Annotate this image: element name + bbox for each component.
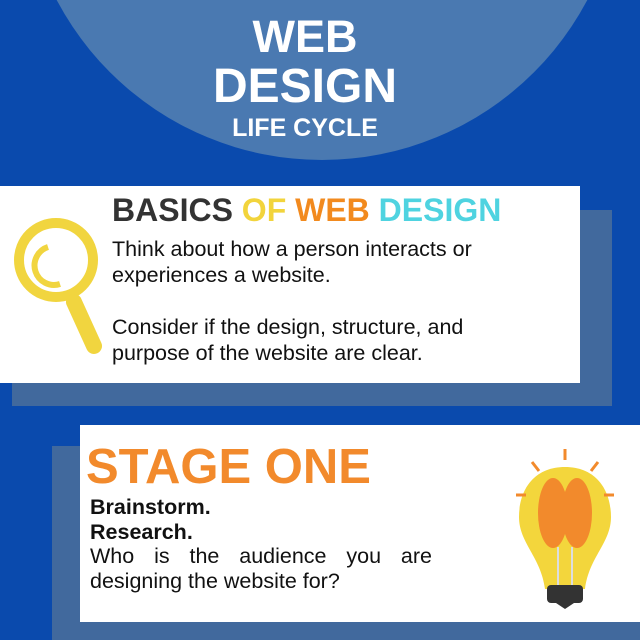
title: DESIGN xyxy=(213,60,397,113)
shadow panel 1 xyxy=(12,210,612,406)
text: stage one body: Who is the audience you are designing the website for? xyxy=(90,544,432,592)
title: LIFE CYCLE xyxy=(232,114,378,142)
header circle xyxy=(22,0,622,160)
title xyxy=(213,11,397,142)
title: WEB xyxy=(252,11,358,62)
icon: lightbulb brain xyxy=(516,449,614,609)
text: stage one body: Brainstorm. xyxy=(90,495,211,519)
icon: magnifier xyxy=(14,218,102,354)
text: stage one body xyxy=(90,495,432,592)
text: basics body xyxy=(112,237,472,365)
text: stage one body: Research. xyxy=(90,520,193,544)
panel: basics xyxy=(0,186,580,383)
text: basics body: Think about how a person interacts or experiences a website. xyxy=(112,237,472,287)
heading: basics: BASICS OF WEB DESIGN xyxy=(112,192,501,228)
text: basics body: Consider if the design, structure, and purpose of the website are clear. xyxy=(112,315,463,365)
shadow panel 2 xyxy=(52,446,640,640)
panel: stage one xyxy=(80,425,640,622)
heading: stage one: STAGE ONE xyxy=(86,440,371,494)
